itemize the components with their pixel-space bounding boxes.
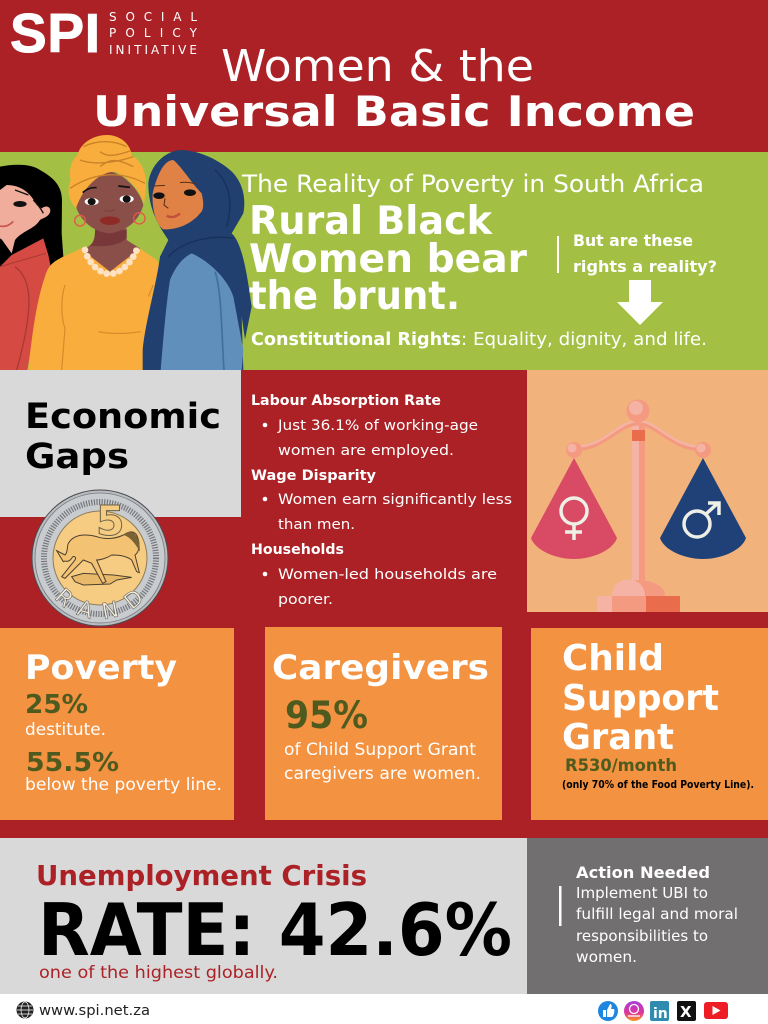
item: labour absorption rate: Just 36.1% of working-age bbox=[277, 418, 478, 434]
headline: rural black women bbox=[249, 199, 528, 319]
text: labour statistics bbox=[251, 393, 512, 608]
card: poverty: 55.5% bbox=[26, 748, 119, 778]
card: child support grant: R530/month bbox=[565, 756, 677, 775]
footer bbox=[0, 994, 768, 1024]
card: poverty: destitute. bbox=[25, 720, 106, 739]
card: poverty: 25% bbox=[25, 690, 88, 720]
card: child support grant: Support bbox=[562, 678, 719, 719]
card: child support grant: Grant bbox=[562, 717, 674, 758]
card: caregivers: Caregivers bbox=[272, 648, 489, 688]
title bbox=[93, 41, 695, 136]
text: constitutional rights: : Equality, dignity, and life. bbox=[461, 329, 707, 350]
icon: linkedin: in bbox=[653, 1006, 668, 1022]
panel: economic gaps heading: Gaps bbox=[25, 437, 129, 477]
text: constitutional rights bbox=[251, 329, 707, 350]
item: labour absorption rate: women are employed. bbox=[278, 443, 454, 459]
heading: reality of poverty: The Reality of Poverty in South Africa bbox=[241, 170, 704, 198]
item: labour absorption rate bbox=[251, 393, 478, 459]
panel: action needed: responsibilities to bbox=[576, 927, 708, 945]
callout: are these rights a reality: rights a reality? bbox=[573, 257, 717, 276]
panel: gender scale bbox=[527, 370, 768, 612]
item: wage disparity: Women earn significantly less bbox=[278, 492, 512, 508]
icon: linkedin bbox=[650, 1001, 669, 1022]
icon: male pan bbox=[660, 458, 746, 559]
panel: economic gaps heading: Economic bbox=[25, 397, 221, 437]
callout: are these rights a reality bbox=[557, 231, 717, 276]
item: wage disparity: than men. bbox=[278, 517, 355, 533]
icon: five rand coin bbox=[32, 490, 168, 626]
card: caregivers: of Child Support Grant bbox=[284, 740, 477, 759]
panel: unemployment crisis bbox=[0, 838, 527, 994]
card: caregivers bbox=[265, 627, 502, 820]
icon: x: X bbox=[680, 1003, 692, 1021]
item: households bbox=[251, 542, 497, 608]
icon: five rand coin: 5 bbox=[96, 497, 125, 545]
logo: SPI Social Policy Initiative: INITIATIVE bbox=[109, 43, 197, 57]
item: households: poorer. bbox=[278, 592, 333, 608]
icon: female pan bbox=[531, 458, 617, 559]
item: wage disparity bbox=[251, 468, 512, 533]
panel: unemployment crisis: RATE: 42.6% bbox=[38, 888, 512, 972]
icon: globe bbox=[16, 1002, 34, 1018]
panel: action needed bbox=[527, 838, 768, 994]
title: Women & the bbox=[221, 41, 534, 92]
callout: are these rights a reality: But are these bbox=[573, 231, 693, 250]
logo: SPI Social Policy Initiative: POLICY bbox=[109, 26, 198, 40]
logo: SPI Social Policy Initiative bbox=[10, 2, 198, 64]
panel: reality of poverty bbox=[0, 135, 768, 370]
logo: SPI Social Policy Initiative: SOCIAL bbox=[109, 10, 197, 24]
icon: youtube bbox=[704, 1002, 728, 1019]
icon: facebook like bbox=[598, 1001, 618, 1021]
card: poverty bbox=[0, 628, 234, 820]
text: constitutional rights: Constitutional Rights bbox=[251, 329, 461, 350]
illustration: three women bbox=[0, 135, 252, 370]
headline: rural black women: the brunt. bbox=[249, 274, 460, 319]
panel: action needed: fulfill legal and moral bbox=[576, 905, 738, 923]
item: households: Households bbox=[251, 542, 344, 558]
panel: unemployment crisis: Unemployment Crisis bbox=[36, 859, 367, 892]
icon: five rand coin: RAND bbox=[54, 588, 142, 620]
icon: x bbox=[677, 1001, 696, 1021]
card: caregivers: 95% bbox=[285, 694, 368, 737]
card: poverty: Poverty bbox=[25, 648, 177, 688]
item: households: Women-led households are bbox=[278, 567, 497, 583]
title: Universal Basic Income bbox=[93, 87, 695, 136]
icon: instagram bbox=[624, 1001, 644, 1021]
panel: action needed: women. bbox=[576, 948, 637, 966]
panel: action needed: Action Needed bbox=[576, 863, 710, 882]
panel: economic gaps heading bbox=[0, 370, 241, 517]
panel: unemployment crisis: one of the highest globally. bbox=[39, 963, 278, 982]
card: child support grant bbox=[531, 628, 768, 820]
panel: action needed: Implement UBI to bbox=[576, 884, 708, 902]
card: poverty: below the poverty line. bbox=[25, 775, 222, 794]
item: wage disparity: Wage Disparity bbox=[251, 468, 377, 484]
headline: rural black women: Rural Black bbox=[249, 199, 493, 244]
text: website: www.spi.net.za bbox=[39, 1003, 150, 1019]
card: caregivers: caregivers are women. bbox=[284, 764, 481, 783]
arrow: down bbox=[617, 280, 663, 325]
headline: rural black women: Women bear bbox=[249, 237, 528, 282]
logo: SPI Social Policy Initiative: SPI bbox=[10, 2, 100, 64]
item: labour absorption rate: Labour Absorption Rate bbox=[251, 393, 441, 409]
card: child support grant: Child bbox=[562, 638, 664, 679]
